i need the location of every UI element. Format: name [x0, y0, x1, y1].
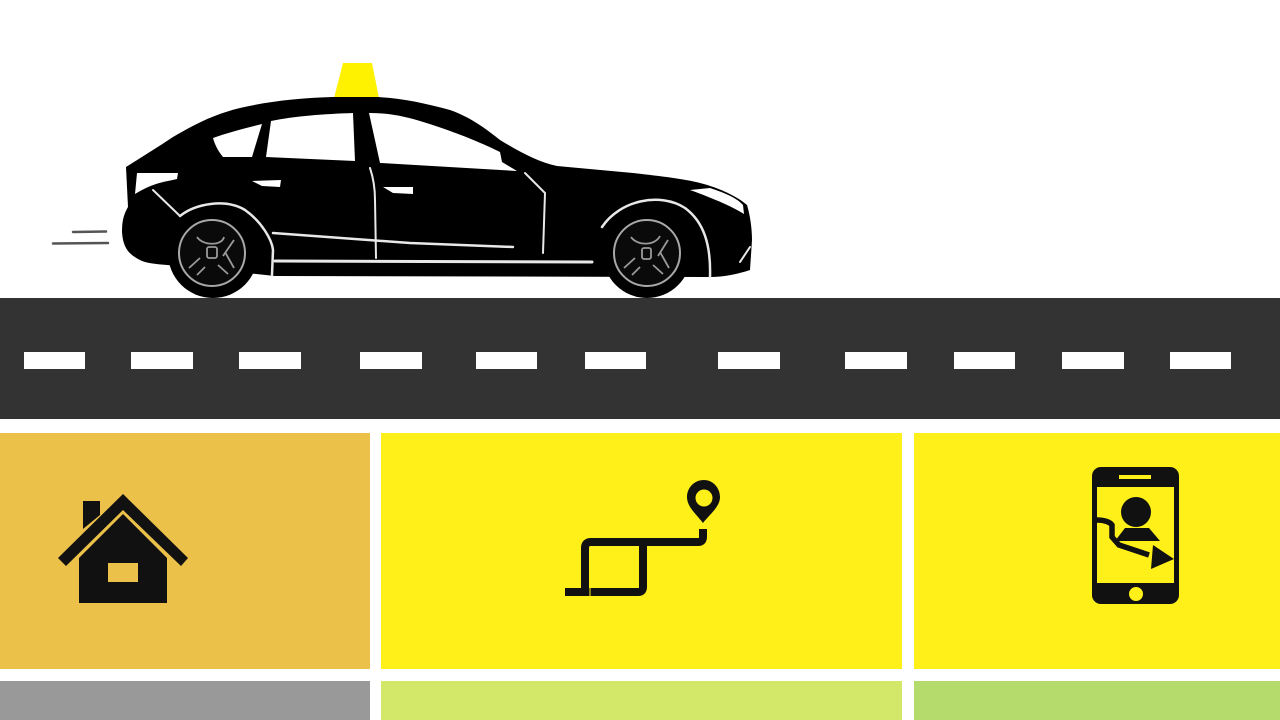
front window — [369, 113, 517, 171]
headlight — [690, 188, 744, 214]
icon: smartphone with passenger — [1092, 467, 1179, 604]
icon: house — [58, 494, 188, 603]
panel: home — [0, 433, 370, 669]
panel: lower left strip — [0, 681, 370, 720]
panel: route — [381, 433, 902, 669]
taxi car — [122, 63, 752, 298]
icon: speed lines — [53, 232, 108, 244]
car body — [122, 97, 752, 277]
icon: route with map pin — [565, 480, 720, 596]
body lines — [153, 168, 750, 277]
panel: mobile app — [914, 433, 1280, 669]
middle window — [266, 113, 355, 161]
panel: lower middle strip — [381, 681, 902, 720]
taxi roof sign — [334, 63, 379, 98]
tail light — [135, 173, 178, 194]
rear wheel — [168, 208, 258, 298]
rear quarter window — [213, 124, 262, 157]
door handles — [252, 180, 413, 194]
front wheel — [603, 210, 691, 298]
panel: lower right strip — [914, 681, 1280, 720]
road — [0, 298, 1280, 419]
